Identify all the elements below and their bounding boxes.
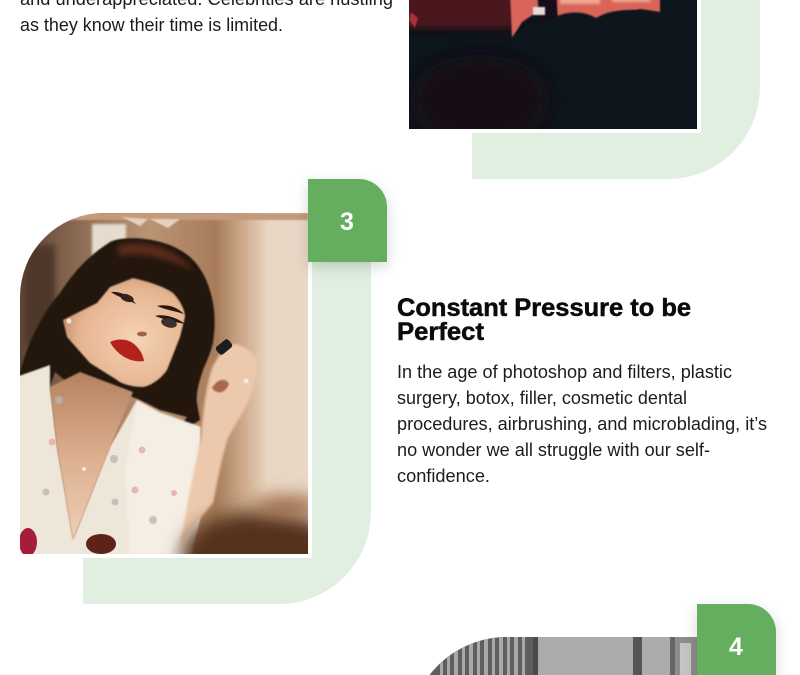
photo: concert crowd <box>409 0 701 133</box>
text block: section 3 body: In the age of photoshop and filters, plastic <box>397 362 732 382</box>
hand and arm <box>180 344 257 545</box>
face <box>63 278 185 387</box>
badge: number 3 <box>308 179 387 262</box>
panel: section 3 pale green backing <box>83 262 371 604</box>
text block: section 3 body: confidence. <box>397 466 490 486</box>
robe dots <box>42 396 157 524</box>
heading: Constant Pressure to be Perfect <box>397 294 691 346</box>
heading: Constant Pressure to be Perfect: Perfect <box>397 318 485 346</box>
text block: section 2 closing lines <box>20 0 393 35</box>
text block: section 3 body: procedures, airbrushing, and microblading, it’s <box>397 414 767 434</box>
robe flowers <box>20 528 37 554</box>
necklace <box>82 467 86 471</box>
mascara tube <box>216 339 232 355</box>
badge: number 4 <box>697 604 776 675</box>
nose <box>137 332 147 336</box>
earring <box>66 318 72 324</box>
lips <box>110 340 144 361</box>
neck and chest <box>50 372 133 540</box>
badge: number 4: 4 <box>729 633 743 661</box>
hair <box>20 238 215 437</box>
photo: grayscale building <box>409 637 697 675</box>
photo: woman applying mascara <box>20 213 312 558</box>
text block: section 3 body: surgery, botox, filler, cosmetic dental <box>397 388 687 408</box>
badge: number 3: 3 <box>340 208 354 236</box>
heading: Constant Pressure to be Perfect: Constant Pressure to be <box>397 294 691 322</box>
text block: section 3 body: no wonder we all struggle with our self- <box>397 440 710 460</box>
text block: section 2 closing lines: as they know their time is limited. <box>20 15 283 35</box>
wall background <box>20 213 308 554</box>
blurred foreground head <box>168 497 308 554</box>
robe <box>16 365 200 560</box>
eyes and brows <box>111 292 185 324</box>
text block: section 3 body <box>397 362 767 486</box>
panel: section 2 pale green backing <box>472 0 760 179</box>
